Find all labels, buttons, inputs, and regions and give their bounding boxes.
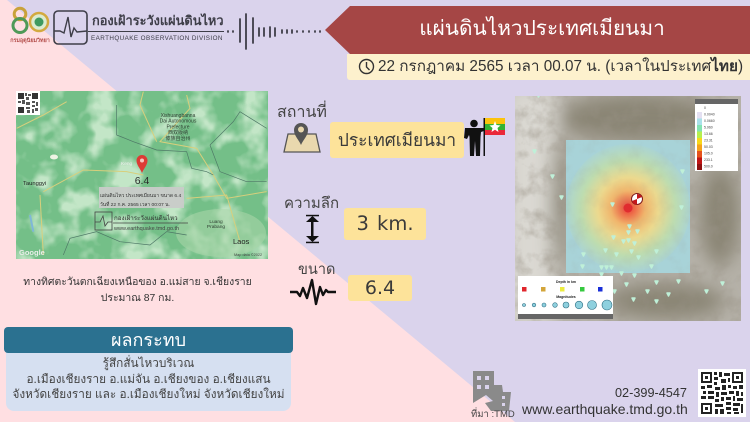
- impact text: จังหวัดเชียงราย และ อ.เมืองเชียงใหม่ จังหวัดเชียงใหม่: [12, 387, 285, 401]
- icon: person with flag: [464, 118, 505, 156]
- division name English: EARTHQUAKE OBSERVATION DIVISION: [91, 34, 223, 42]
- location value: [330, 122, 464, 158]
- depth label: ความลึก: [284, 195, 339, 212]
- label: Keng: Keng: [121, 161, 133, 167]
- date and time bar: [347, 54, 750, 80]
- location description: [23, 276, 252, 304]
- google mark: Google: [19, 248, 45, 257]
- intensity legend: 0.0660: [704, 119, 715, 123]
- icon: collapsed building: [473, 371, 511, 411]
- icon: seismograph: [53, 10, 88, 45]
- depth value: 3 km.: [356, 212, 414, 235]
- magnitude label: ขนาด: [298, 262, 335, 278]
- location map panel: www.earthquake.tmd.go.th: [113, 226, 179, 232]
- label: Luang Prabang: Prabang: [207, 224, 225, 230]
- logo: department anniversary: [10, 6, 50, 44]
- intensity legend: 23.31: [704, 138, 713, 142]
- icon: seismic wave: [290, 278, 336, 306]
- location description: ทางทิศตะวันตกเฉียงเหนือของ อ.แม่สาย จ.เชียงราย: [23, 277, 252, 288]
- focal mechanism: [632, 194, 642, 204]
- logo: department anniversary: กรมอุตุนิยมวิทยา: [10, 37, 50, 44]
- title banner: [325, 6, 750, 54]
- label: Laos: Laos: [233, 237, 250, 246]
- phone number: 02-399-4547: [615, 386, 687, 400]
- intensity legend: 233.1: [704, 158, 713, 162]
- depth legend: [518, 276, 613, 319]
- label: Xishuangbanna prefecture: Prefecture: [166, 124, 190, 130]
- date text: 22 กรกฎาคม 2565 เวลา 00.07 น. (เวลาในประเทศไทย): [378, 58, 743, 74]
- qr code: [698, 369, 746, 417]
- intensity legend: [695, 99, 738, 171]
- watermark: กองเฝ้าระวังแผ่นดินไหว: [114, 214, 178, 222]
- icon: depth arrow: [306, 214, 319, 244]
- epicentre pin: [136, 155, 148, 173]
- label: Luang Prabang: Luang: [209, 220, 223, 225]
- impact text: อ.เมืองเชียงราย อ.แม่จัน อ.เชียงของ อ.เชียงแสน: [26, 372, 271, 386]
- intensity square: [566, 140, 690, 273]
- icon: map pin: [283, 123, 321, 153]
- intensity legend: 5.960: [704, 126, 713, 130]
- map data: Map data ©2022: [234, 253, 262, 257]
- intensity legend: 105.0: [704, 152, 713, 156]
- impact text: [12, 354, 285, 401]
- impact body: [6, 347, 291, 411]
- impact text: รู้สึกสั่นไหวบริเวณ: [103, 356, 194, 370]
- title: แผ่นดินไหวประเทศเมียนมา: [419, 17, 665, 40]
- magnitude value: 6.4: [365, 277, 395, 299]
- impact heading: [4, 327, 293, 353]
- shakemap panel: [515, 96, 741, 321]
- epicentre marker: [624, 204, 632, 212]
- location value: ประเทศเมียนมา: [338, 130, 456, 150]
- location map panel: [16, 91, 268, 259]
- division name Thai: กองเฝ้าระวังแผ่นดินไหว: [92, 13, 224, 28]
- decorative sound wave: [227, 13, 321, 50]
- magnitude label: 6.4: [135, 175, 149, 187]
- qr code small: [16, 91, 40, 115]
- intensity legend: 500.0: [704, 164, 713, 168]
- info box: [99, 187, 184, 208]
- watermark icon: [95, 212, 112, 230]
- info date: วันที่ 22 ก.ค. 2565 เวลา 00:07 น.: [100, 201, 170, 208]
- label: Xishuangbanna prefecture: 西双版纳: [168, 129, 188, 136]
- depth value: [344, 208, 426, 240]
- icon: clock: [358, 58, 374, 74]
- intensity legend: 0: [704, 106, 706, 110]
- info text: แผ่นดินไหว ประเทศเมียนมา ขนาด 6.4: [100, 192, 182, 199]
- impact heading: ผลกระทบ: [111, 330, 186, 350]
- label: Taunggyi: Taunggyi: [23, 181, 46, 187]
- location label: สถานที่: [277, 104, 327, 121]
- magnitude value: [348, 275, 412, 301]
- logo: earthquake observation division: [53, 10, 224, 45]
- location description: ประมาณ 87 กม.: [101, 293, 174, 304]
- website: www.earthquake.tmd.go.th: [522, 401, 688, 417]
- depth legend: Magnitudes: [556, 295, 576, 299]
- intensity legend: 50.03: [704, 145, 713, 149]
- intensity legend: 0.0040: [704, 112, 715, 116]
- intensity legend: 13.66: [704, 132, 713, 136]
- label: Xishuangbanna prefecture: Dai Autonomous: [160, 119, 197, 125]
- source label: ที่มา :TMD: [471, 409, 515, 420]
- label: Xishuangbanna prefecture: Xishuangbanna: [161, 113, 195, 119]
- label: Xishuangbanna prefecture: 傣族自治州: [165, 135, 191, 142]
- depth legend: Depth in km: [556, 280, 576, 284]
- aftershock markers: [533, 94, 724, 303]
- impact panel: [4, 327, 293, 411]
